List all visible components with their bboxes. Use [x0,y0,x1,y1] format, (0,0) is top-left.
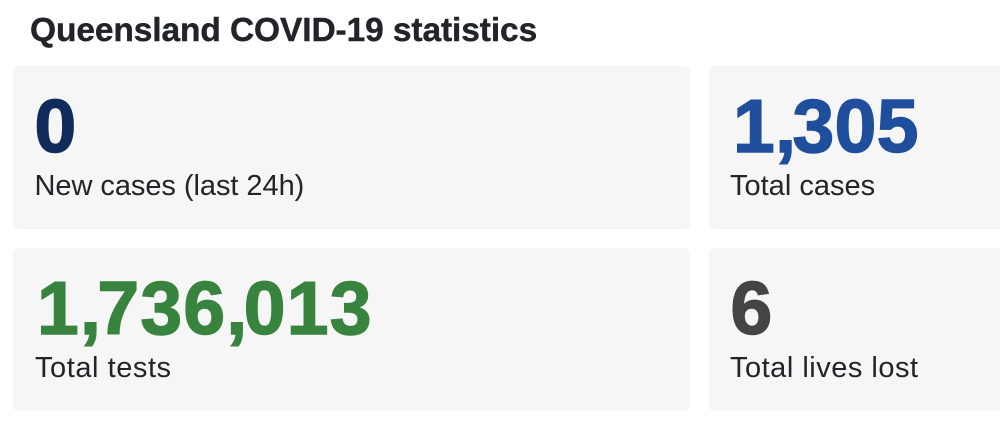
title: Queensland COVID-19 statistics [30,12,537,49]
number: total lives lost: 6 [730,266,774,350]
label: new cases: New cases (last 24h) [34,170,304,202]
label: total tests: Total tests [35,352,172,384]
number: total cases: 1,305 [733,84,919,168]
panel: total lives lost [709,248,1000,411]
panel: new cases [13,66,690,229]
panel: total cases [709,66,1000,229]
label: total lives lost: Total lives lost [730,352,919,384]
label: total cases: Total cases [730,170,875,202]
number: new cases: 0 [34,84,78,168]
number: total tests: 1,736,013 [37,266,373,350]
panel: total tests [13,248,690,411]
